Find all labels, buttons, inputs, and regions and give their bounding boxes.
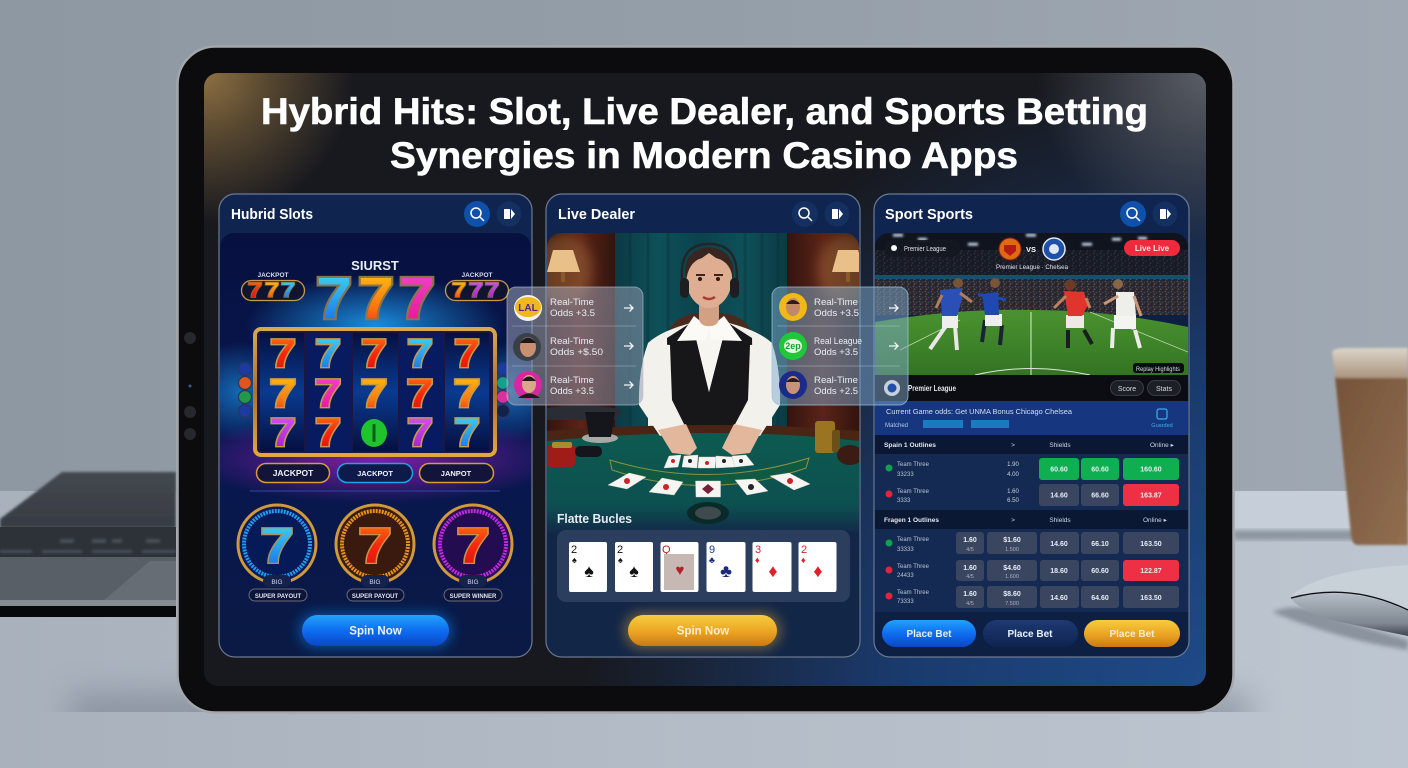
table props behind rail xyxy=(547,405,622,420)
gaming table xyxy=(547,425,859,656)
panel: live dealer xyxy=(533,194,878,657)
slot machine reels: 7 xyxy=(407,332,433,376)
slots banner: JACKPOT xyxy=(257,272,289,279)
button: place bet gold: Place Bet xyxy=(1109,629,1155,640)
league strip xyxy=(875,375,1188,401)
odds table 2: 1.600 xyxy=(1005,574,1019,580)
glass overlay: right odds list xyxy=(772,287,908,405)
odds table 2: 1.500 xyxy=(1005,547,1019,553)
slot machine reels xyxy=(255,329,495,455)
odds table 1: 66.60 xyxy=(1091,492,1109,500)
odds table 2: 33333 xyxy=(897,547,914,553)
odds table 1: 6.50 xyxy=(1007,498,1019,504)
replay tag: Replay Highlights xyxy=(1136,367,1180,373)
odds table 1: 33233 xyxy=(897,472,914,478)
left odds text: Real-Time xyxy=(550,336,594,346)
jackpot coin: purple: 7 xyxy=(456,518,490,574)
slot machine reels: 7 xyxy=(361,332,387,376)
slot machine reels: 7 xyxy=(314,372,342,416)
slot machine reels: 7 xyxy=(407,411,433,455)
slot machine reels: 7 xyxy=(315,332,341,376)
odds table 2: Fragen 1 Outlines xyxy=(884,517,939,524)
right odds text: Real-Time xyxy=(814,375,858,385)
avatar: green badge: 2ep xyxy=(785,341,801,351)
panel: hybrid slots xyxy=(218,193,533,658)
slots banner: 7 xyxy=(484,279,500,302)
odds table 2: Team Three xyxy=(897,564,930,570)
match header: Premier League xyxy=(904,246,946,253)
right odds text: Real League xyxy=(814,336,862,346)
avatar: man on pink xyxy=(514,371,542,399)
right odds text: Odds +2.5 xyxy=(814,386,858,396)
right odds text: Odds +3.5 xyxy=(814,347,858,357)
hand of cards: ♠ xyxy=(629,561,639,581)
odds table 2: 24433 xyxy=(897,573,914,579)
left odds text: Real-Time xyxy=(550,297,594,307)
info banner: Matched xyxy=(885,423,908,429)
slots banner: 7 xyxy=(399,266,435,331)
odds table 2: Shields xyxy=(1049,517,1071,524)
right odds text: Odds +3.5 xyxy=(814,308,859,318)
jackpot pills: JACKPOT xyxy=(273,468,314,478)
slots banner: 7 xyxy=(358,266,394,331)
jackpot coin: purple xyxy=(434,505,512,601)
odds table 2 xyxy=(875,510,1188,612)
icon: sound xyxy=(1152,202,1178,226)
left odds text xyxy=(550,297,603,396)
odds table 2: 66.10 xyxy=(1091,541,1109,548)
slot machine reels: 7 xyxy=(454,372,480,416)
icon: search xyxy=(464,201,490,227)
replay tag xyxy=(1133,363,1184,373)
left odds text: Odds +$.50 xyxy=(550,347,603,357)
lamps xyxy=(533,234,878,306)
icon: sound xyxy=(496,202,522,226)
jackpot pills: JANPOT xyxy=(441,469,472,478)
match header: Premier League · Chelsea xyxy=(996,264,1068,271)
odds table 2: > xyxy=(1011,517,1015,524)
slots banner: 7 xyxy=(452,279,466,302)
panel: sports xyxy=(874,194,1189,657)
jackpot pills xyxy=(256,464,494,482)
jackpot coin: orange: 7 xyxy=(358,518,392,574)
icon: search xyxy=(1120,201,1146,227)
right odds text: Real-Time xyxy=(814,297,858,307)
computer mouse xyxy=(1272,565,1408,650)
hand of cards: ♠ xyxy=(572,555,577,565)
jackpot coin: blue: 7 xyxy=(260,518,294,574)
odds table 2: 14.60 xyxy=(1050,595,1068,602)
odds table 2: 4/5 xyxy=(966,574,974,580)
hand of cards: ♦ xyxy=(768,561,778,581)
hand of cards: ♠ xyxy=(584,561,594,581)
tablet device xyxy=(178,46,1234,712)
button: spin now gold xyxy=(624,612,781,649)
hand of cards: ♠ xyxy=(618,555,623,565)
jackpot pills: JACKPOT xyxy=(357,469,393,478)
league strip: Premier League xyxy=(908,383,956,393)
odds table 2: 1.60 xyxy=(963,537,977,544)
odds table 2: 4/5 xyxy=(966,547,974,553)
slot machine reels: 7 xyxy=(406,372,434,416)
slot machine reels: 7 xyxy=(454,411,480,455)
glass overlay: left odds list xyxy=(507,287,643,405)
jackpot coin: blue: SUPER PAYOUT xyxy=(255,594,302,600)
slots banner xyxy=(240,261,510,320)
slots banner: 7 xyxy=(264,279,280,302)
info banner: Guarded xyxy=(1151,423,1173,429)
hand of cards: 2 xyxy=(617,544,623,556)
jackpot coin: orange: BIG xyxy=(369,579,381,586)
slots banner: SIURST xyxy=(351,258,399,273)
odds table 1: Shields xyxy=(1049,442,1071,449)
icon: search xyxy=(792,201,818,227)
right odds text xyxy=(814,297,862,396)
icon: sound xyxy=(824,202,850,226)
button: place bet gold xyxy=(1084,620,1180,647)
odds table 2: 4/5 xyxy=(966,601,974,607)
odds table 2: $1.60 xyxy=(1003,537,1021,544)
hand of cards: 2 xyxy=(571,544,577,556)
table cards xyxy=(608,455,810,497)
live dealer heading: Live Dealer xyxy=(558,206,635,223)
hand of cards: Q xyxy=(662,544,671,556)
jackpot coin: orange xyxy=(336,505,414,601)
odds table 2: $4.60 xyxy=(1003,565,1021,572)
title: Synergies in Modern Casino Apps xyxy=(390,135,1018,176)
odds table 1: 160.60 xyxy=(1140,466,1162,474)
hand of cards xyxy=(557,530,850,602)
tablet screen background xyxy=(204,73,1206,686)
hand of cards: ♣ xyxy=(720,561,732,581)
league strip: Score xyxy=(1118,386,1136,393)
jackpot coin: blue xyxy=(238,505,316,601)
odds table 1: Team Three xyxy=(897,489,930,495)
slots game area xyxy=(220,233,531,656)
odds table 1: 3333 xyxy=(897,498,911,504)
dealer xyxy=(648,244,772,430)
odds table 2: 122.87 xyxy=(1140,568,1162,575)
jackpot coin: purple: SUPER WINNER xyxy=(450,594,497,600)
dealer arms and hands xyxy=(639,343,780,455)
hand of cards: 9 xyxy=(709,544,715,556)
slot machine reels: 7 xyxy=(270,332,296,376)
slot machine reels: 7 xyxy=(360,372,388,416)
slot machine reels: 7 xyxy=(270,372,296,416)
slot machine reels: 7 xyxy=(454,332,480,376)
odds table 1: 4.00 xyxy=(1007,472,1019,478)
hand of cards: ♣ xyxy=(709,555,715,565)
avatar: man xyxy=(513,333,541,361)
tablet shadow xyxy=(62,683,1260,712)
odds table 1: 1.60 xyxy=(1007,489,1019,495)
odds table 2: 18.60 xyxy=(1050,568,1068,575)
slot machine reels: 7 xyxy=(315,411,341,455)
odds table 2: 1.60 xyxy=(963,591,977,598)
odds table 2: 7.500 xyxy=(1005,601,1019,607)
title xyxy=(261,91,1148,176)
hand of cards: ♥ xyxy=(676,562,685,579)
table props xyxy=(547,412,863,467)
laptop on desk xyxy=(0,472,176,617)
odds table 2: Online ▸ xyxy=(1143,517,1168,524)
odds table 1: 1.90 xyxy=(1007,462,1019,468)
jackpot coin: orange: SUPER PAYOUT xyxy=(352,594,398,600)
odds table 1: 60.60 xyxy=(1050,466,1068,474)
odds table 2: 64.60 xyxy=(1091,595,1109,602)
odds table 2: 60.60 xyxy=(1091,568,1109,575)
info banner: Current Game odds: Get UNMA Bonus Chicago Chelsea xyxy=(886,409,1072,416)
left odds text: Real-Time xyxy=(550,375,594,385)
jackpot coin: purple: BIG xyxy=(467,579,479,586)
coffee cup xyxy=(1332,348,1408,545)
stadium xyxy=(875,233,1188,375)
league strip: Stats xyxy=(1156,386,1172,393)
club crest xyxy=(884,380,900,396)
button: place bet blue: Place Bet xyxy=(906,629,952,640)
hand of cards: ♦ xyxy=(755,555,760,565)
button: place bet navy: Place Bet xyxy=(1007,629,1053,640)
sports content xyxy=(875,233,1188,656)
slots banner: 7 xyxy=(248,279,262,302)
button: spin now gold: Spin Now xyxy=(677,626,729,638)
odds table 1: Spain 1 Outlines xyxy=(884,442,936,449)
match header: VS xyxy=(1026,245,1036,254)
slots banner: JACKPOT xyxy=(461,272,493,279)
left odds arrows xyxy=(624,304,633,388)
left odds text: Odds +3.5 xyxy=(550,308,595,318)
avatar: yellow xyxy=(779,293,807,321)
button: place bet navy xyxy=(983,620,1078,647)
hand label: Flatte Bucles xyxy=(557,512,632,526)
odds table 1: > xyxy=(1011,442,1015,449)
odds table 1: Team Three xyxy=(897,462,930,468)
odds table 2: $8.60 xyxy=(1003,591,1021,598)
slots banner: 7 xyxy=(468,279,484,302)
live dealer scene xyxy=(533,233,878,656)
hand of cards: ♦ xyxy=(801,555,806,565)
slots banner: 7 xyxy=(280,279,296,302)
button: spin now blue: Spin Now xyxy=(349,626,402,638)
odds table 2: 1.60 xyxy=(963,565,977,572)
hand of cards: 3 xyxy=(755,544,761,556)
odds table 1: 60.60 xyxy=(1091,466,1109,474)
slots banner: 7 xyxy=(316,266,352,331)
avatar: blue xyxy=(779,371,807,399)
sports heading: Sport Sports xyxy=(885,206,973,223)
odds table 1: 163.87 xyxy=(1140,492,1162,500)
slots heading: Hubrid Slots xyxy=(231,206,313,223)
odds table 2: 163.50 xyxy=(1140,595,1162,602)
odds table 2: Team Three xyxy=(897,590,930,596)
button: spin now blue xyxy=(298,612,453,649)
odds table 1: Online ▸ xyxy=(1150,442,1175,449)
info banner xyxy=(875,401,1188,435)
right odds arrows xyxy=(889,304,898,350)
odds table 1: 14.60 xyxy=(1050,492,1068,500)
avatar: team badge: LAL xyxy=(518,303,538,314)
match header: Live Live xyxy=(1135,244,1170,253)
title: Hybrid Hits: Slot, Live Dealer, and Sports Betting xyxy=(261,91,1148,132)
button: place bet blue xyxy=(882,620,976,647)
left odds text: Odds +3.5 xyxy=(550,386,594,396)
hand of cards: ♦ xyxy=(813,561,823,581)
odds table 2: 14.60 xyxy=(1050,541,1068,548)
hand of cards: 2 xyxy=(801,544,807,556)
odds table 2: 163.50 xyxy=(1140,541,1162,548)
match header xyxy=(884,238,1180,271)
slot machine reels: 7 xyxy=(270,411,296,455)
odds table 1 xyxy=(875,435,1188,510)
jackpot coin: blue: BIG xyxy=(271,579,283,586)
reel side chips xyxy=(238,362,510,418)
odds table 2: 73333 xyxy=(897,599,914,605)
footballers xyxy=(930,278,1141,350)
odds table 2: Team Three xyxy=(897,537,930,543)
